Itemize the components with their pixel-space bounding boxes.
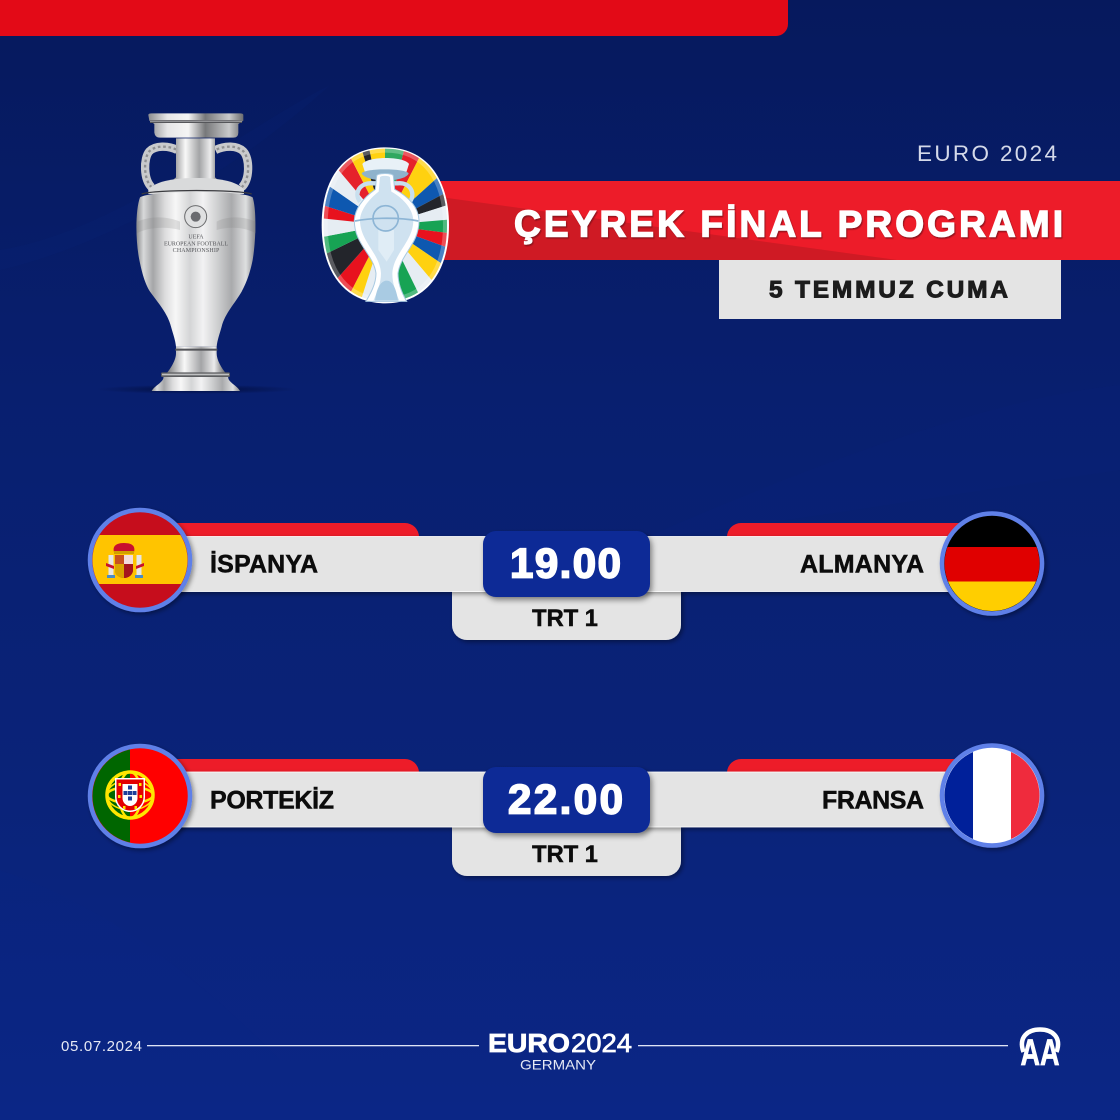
emblem	[185, 206, 207, 228]
top red bar	[0, 0, 788, 36]
date text: 5 TEMMUZ CUMA	[769, 276, 1008, 304]
neck	[171, 138, 220, 182]
time box	[483, 767, 650, 833]
euro 2024 tournament logo	[322, 147, 449, 304]
footer logo text: EURO	[488, 1030, 570, 1058]
left handle	[145, 147, 177, 187]
right handle	[215, 147, 248, 187]
channel: TRT 1: TRT 1	[532, 605, 598, 632]
TRT panel	[452, 590, 681, 640]
team name: Spain: İSPANYA	[210, 550, 318, 578]
armillary sphere and shield	[107, 772, 153, 818]
team name: Portugal: PORTEKİZ	[210, 786, 334, 814]
footer rule left	[147, 1045, 479, 1046]
footer	[61, 1030, 1060, 1073]
engraved text: EUROPEAN FOOTBALL	[164, 241, 228, 247]
time: 22.00	[508, 776, 623, 822]
red tab left	[175, 523, 419, 537]
logo colour rays	[324, 148, 447, 299]
channel: TRT 1: TRT 1	[532, 841, 598, 868]
flag: Germany	[940, 514, 1046, 616]
coat of arms	[106, 543, 144, 578]
flag: Spain	[88, 510, 192, 610]
title text: ÇEYREK FİNAL PROGRAMI	[514, 204, 1063, 244]
time: 19.00	[510, 540, 621, 586]
date box	[719, 260, 1061, 319]
rim	[148, 113, 243, 138]
engraved text: CHAMPIONSHIP	[173, 248, 220, 254]
match 2: Portugal vs France	[88, 744, 1046, 876]
base	[152, 372, 240, 391]
team name: France: FRANSA	[822, 786, 924, 814]
red tab right	[727, 759, 960, 772]
title ribbon	[440, 181, 1120, 260]
engraved text	[164, 235, 228, 254]
time box	[483, 531, 650, 597]
engraved text: UEFA	[188, 235, 204, 241]
footer logo text	[488, 1030, 632, 1072]
footer date: 05.07.2024	[61, 1038, 142, 1055]
TRT panel	[452, 826, 681, 876]
body	[136, 192, 255, 347]
logo trophy	[354, 158, 419, 301]
footer logo text: 2024	[571, 1030, 632, 1058]
foot	[167, 347, 226, 373]
shoulder	[148, 178, 244, 194]
footer rule right	[638, 1045, 1008, 1046]
red tab left	[175, 759, 419, 772]
team name: Germany: ALMANYA	[800, 550, 924, 578]
flag: France	[940, 744, 1046, 848]
trophy	[97, 113, 297, 394]
match 1: Spain vs Germany	[88, 510, 1046, 640]
Anadolu Agency logo	[1020, 1030, 1060, 1073]
footer logo text: GERMANY	[520, 1056, 597, 1072]
Anadolu Agency logo: AA	[1020, 1032, 1060, 1073]
flag: Portugal	[88, 744, 190, 848]
team bar	[170, 536, 960, 592]
EURO 2024 label: EURO 2024	[917, 141, 1057, 166]
team bar	[170, 772, 960, 827]
red tab right	[727, 523, 960, 537]
